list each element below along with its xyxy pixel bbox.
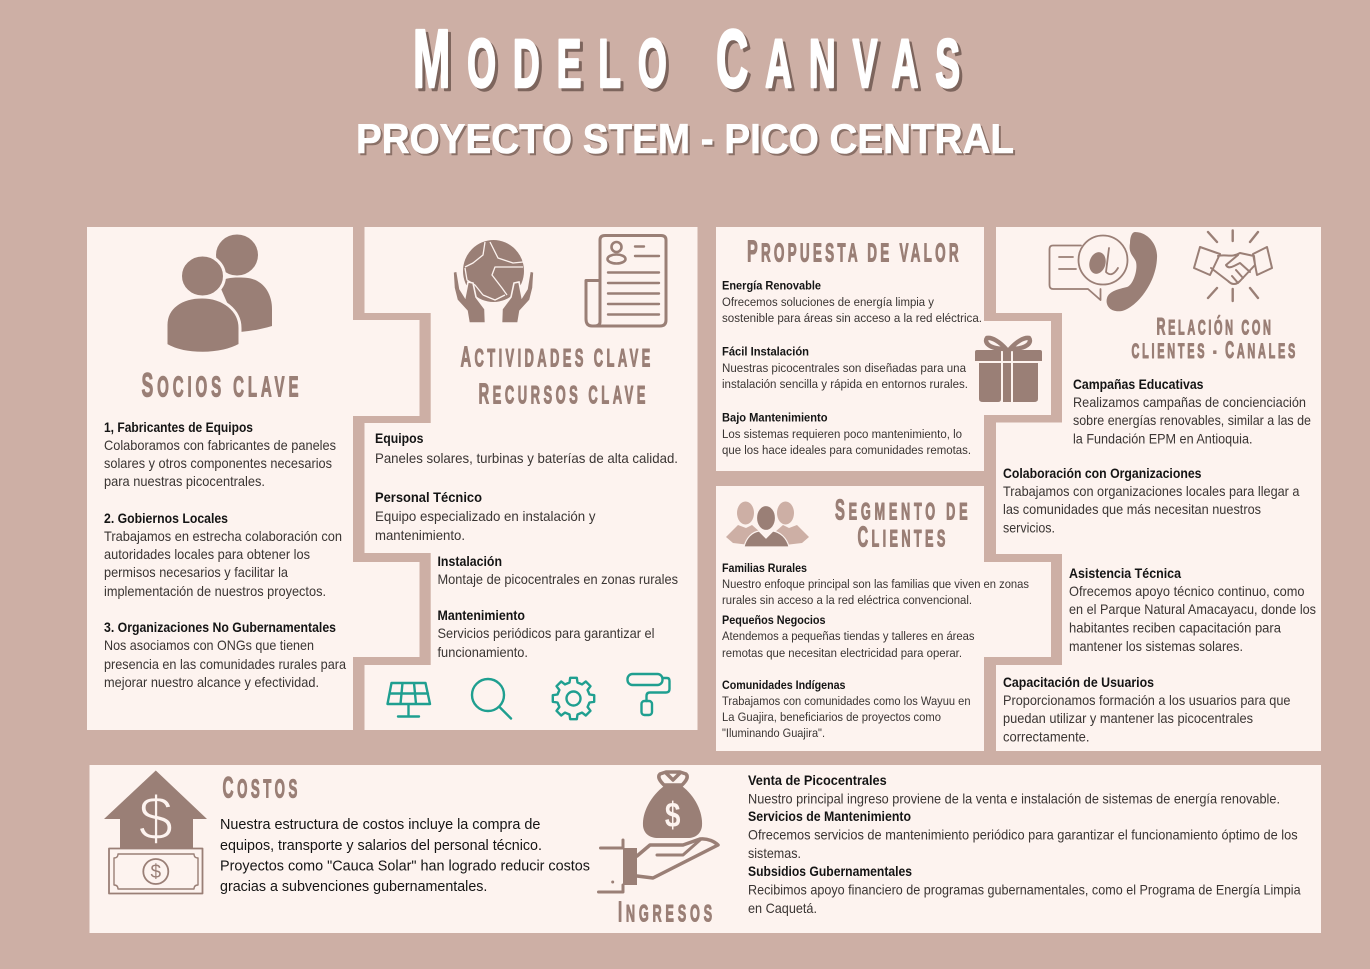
heading: ingresos: INGRESOS bbox=[618, 895, 712, 928]
text block: colaboración con organizaciones: Trabajamos con organizaciones locales para llegar a bbox=[1003, 484, 1300, 499]
text block: propuesta de valor: Ofrecemos soluciones de energía limpia y bbox=[722, 295, 935, 309]
text block: asistencia técnica bbox=[1069, 566, 1316, 654]
title: MODELO bbox=[416, 17, 670, 109]
text block: campañas educativas: la Fundación EPM en Antioquia. bbox=[1073, 432, 1252, 446]
text block: colaboración con organizaciones: las comunidades que más necesitan nuestros bbox=[1003, 502, 1261, 517]
text block: colaboración con organizaciones: servicios. bbox=[1003, 520, 1055, 536]
text block: recursos clave: mantenimiento. bbox=[375, 528, 465, 543]
heading: relación con clientes - canales: RELACIÓN CON bbox=[1156, 314, 1271, 341]
text block: costos: gracias a subvenciones gubernamentales. bbox=[220, 878, 487, 895]
text block: actividades clave: Montaje de picocentrales en zonas rurales bbox=[438, 572, 678, 587]
text block: segmento de clientes: "Iluminando Guajira". bbox=[722, 726, 825, 740]
text block: capacitación de usuarios: Proporcionamos formación a los usuarios para que bbox=[1003, 693, 1290, 708]
icon: two people bbox=[166, 234, 272, 353]
icon: hands holding globe bbox=[453, 240, 534, 323]
text block: propuesta de valor: Energía Renovable bbox=[722, 278, 821, 292]
text block: costos: equipos, transporte y salarios del personal técnico. bbox=[220, 837, 542, 854]
text block: recursos clave: Paneles solares, turbinas y baterías de alta calidad. bbox=[375, 451, 678, 466]
text block: segmento de clientes: rurales sin acceso a la red eléctrica convencional. bbox=[722, 593, 972, 607]
text block: costos bbox=[220, 816, 590, 895]
text block: colaboración con organizaciones bbox=[1003, 466, 1300, 536]
text block: segmento de clientes: Familias Rurales bbox=[722, 561, 807, 575]
text block: asistencia técnica: en el Parque Natural Amacayacu, donde los bbox=[1069, 602, 1316, 617]
text block: actividades clave bbox=[438, 554, 678, 660]
text block: ingresos: Servicios de Mantenimiento bbox=[748, 809, 911, 824]
text block: propuesta de valor: Fácil Instalación bbox=[722, 344, 809, 358]
text block: actividades clave: Mantenimiento bbox=[438, 608, 525, 623]
text block: socios clave: Colaboramos con fabricantes de paneles bbox=[104, 438, 336, 453]
text block: propuesta de valor: instalación sencilla y rápida en entornos rurales. bbox=[722, 377, 968, 391]
text block: recursos clave bbox=[375, 431, 678, 543]
text block: capacitación de usuarios bbox=[1003, 675, 1290, 744]
text block: segmento de clientes: Trabajamos con comunidades como los Wayuu en bbox=[722, 694, 970, 708]
text block: actividades clave: funcionamiento. bbox=[438, 645, 528, 660]
text block: segmento de clientes: Atendemos a pequeñas tiendas y talleres en áreas bbox=[722, 629, 974, 643]
text block: segmento de clientes bbox=[722, 561, 1029, 740]
title: CANVAS bbox=[716, 14, 960, 106]
text block: socios clave: Nos asociamos con ONGs que tienen bbox=[104, 638, 314, 653]
text block: campañas educativas: Realizamos campañas de concienciación bbox=[1073, 395, 1306, 410]
panel: segmento de clientes bbox=[716, 486, 1051, 751]
text block: asistencia técnica: habitantes reciben capacitación para bbox=[1069, 620, 1281, 636]
icon: document resume bbox=[586, 236, 666, 326]
icon: house with dollar and banknote: $ bbox=[151, 862, 162, 883]
text block: propuesta de valor: Nuestras picocentrales son diseñadas para una bbox=[722, 361, 966, 375]
heading: recursos clave: RECURSOS CLAVE bbox=[478, 377, 645, 410]
text block: socios clave: permisos necesarios y facilitar la bbox=[104, 565, 288, 580]
text block: asistencia técnica: Asistencia Técnica bbox=[1069, 566, 1181, 581]
text block: socios clave: 3. Organizaciones No Gubernamentales bbox=[104, 620, 336, 635]
text block: actividades clave: Instalación bbox=[438, 554, 502, 569]
icon: contact phone and at sign bbox=[1050, 232, 1157, 311]
text block: ingresos: Venta de Picocentrales bbox=[748, 773, 887, 788]
text block: ingresos: en Caquetá. bbox=[748, 901, 817, 916]
text block: ingresos: sistemas. bbox=[748, 846, 801, 861]
text block: recursos clave: Equipos bbox=[375, 431, 424, 446]
text block: segmento de clientes: Comunidades Indígenas bbox=[722, 678, 846, 692]
heading: relación con clientes - canales bbox=[1132, 314, 1295, 364]
panel: relación con clientes y canales bbox=[996, 227, 1321, 751]
text block: socios clave: presencia en las comunidades rurales para bbox=[104, 657, 346, 672]
text block: actividades clave: Servicios periódicos para garantizar el bbox=[438, 626, 654, 641]
text block: socios clave: para nuestras picocentrales. bbox=[104, 474, 265, 489]
panel: costos e ingresos bbox=[90, 765, 1321, 933]
text block: campañas educativas bbox=[1073, 377, 1311, 446]
text block: segmento de clientes: Pequeños Negocios bbox=[722, 613, 826, 627]
text block: segmento de clientes: Nuestro enfoque principal son las familias que viven en zonas bbox=[722, 577, 1029, 591]
text block: socios clave: Trabajamos en estrecha colaboración con bbox=[104, 529, 342, 544]
text block: propuesta de valor: que los hace ideales para comunidades remotas. bbox=[722, 443, 971, 457]
icon: money bag on hand: $ bbox=[665, 795, 681, 835]
text block: campañas educativas: Campañas Educativas bbox=[1073, 377, 1204, 392]
text block: segmento de clientes: remotas que necesitan electricidad para operar. bbox=[722, 646, 962, 660]
text block: recursos clave: Personal Técnico bbox=[375, 490, 482, 505]
text block: socios clave bbox=[104, 420, 346, 690]
text block: ingresos: Ofrecemos servicios de mantenimiento periódico para garantizar el funcionamiento óptimo de los bbox=[748, 828, 1298, 842]
text block: ingresos: Subsidios Gubernamentales bbox=[748, 864, 912, 879]
text block: socios clave: solares y otros componentes necesarios bbox=[104, 456, 332, 471]
panel: actividades y recursos clave bbox=[364, 227, 698, 730]
text block: socios clave: 2. Gobiernos Locales bbox=[104, 511, 228, 526]
icon: gear bbox=[553, 678, 594, 719]
text block: asistencia técnica: Ofrecemos apoyo técnico continuo, como bbox=[1069, 584, 1304, 599]
subtitle: PROYECTO STEM - PICO CENTRAL bbox=[358, 117, 1016, 164]
text block: recursos clave: Equipo especializado en instalación y bbox=[375, 509, 596, 524]
icon: gift box bbox=[975, 338, 1042, 402]
text block: colaboración con organizaciones: Colaboración con Organizaciones bbox=[1003, 466, 1202, 481]
text block: propuesta de valor: sostenible para áreas sin acceso a la red eléctrica. bbox=[722, 311, 982, 325]
text block: socios clave: mejorar nuestro alcance y efectividad. bbox=[104, 675, 319, 690]
text block: propuesta de valor: Los sistemas requieren poco mantenimiento, lo bbox=[722, 427, 962, 441]
heading: relación con clientes - canales: CLIENTES - CANALES bbox=[1132, 338, 1295, 364]
text block: capacitación de usuarios: puedan utilizar y mantener las picocentrales bbox=[1003, 711, 1253, 726]
heading: segmento de clientes: SEGMENTO DE bbox=[835, 493, 968, 526]
text block: campañas educativas: sobre energías renovables, similar a las de bbox=[1073, 413, 1311, 428]
title: CANVAS bbox=[719, 17, 963, 109]
heading: segmento de clientes: CLIENTES bbox=[858, 520, 945, 553]
text block: socios clave: autoridades locales para obtener los bbox=[104, 547, 310, 562]
text block: costos: Proyectos como "Cauca Solar" han logrado reducir costos bbox=[220, 858, 590, 874]
subtitle: PROYECTO STEM - PICO CENTRAL bbox=[356, 115, 1014, 162]
text block: socios clave: 1, Fabricantes de Equipos bbox=[104, 420, 253, 435]
text block: ingresos bbox=[748, 773, 1301, 916]
icon: group of people bbox=[726, 502, 809, 547]
text block: capacitación de usuarios: correctamente. bbox=[1003, 730, 1090, 744]
title: MODELO bbox=[413, 14, 667, 106]
title bbox=[413, 14, 963, 109]
heading: actividades clave: ACTIVIDADES CLAVE bbox=[460, 340, 650, 373]
panel: socios clave bbox=[87, 227, 420, 730]
heading: segmento de clientes bbox=[835, 493, 968, 553]
panel: propuesta de valor bbox=[716, 227, 1051, 471]
heading: socios clave: SOCIOS CLAVE bbox=[142, 365, 299, 404]
text block: costos: Nuestra estructura de costos incluye la compra de bbox=[220, 816, 540, 833]
heading: propuesta de valor: PROPUESTA DE VALOR bbox=[747, 235, 959, 269]
icon: magnifier bbox=[472, 679, 511, 718]
text block: asistencia técnica: mantener los sistemas solares. bbox=[1069, 639, 1243, 654]
icon: house with dollar and banknote bbox=[104, 770, 207, 894]
icon: house with dollar and banknote: $ bbox=[139, 785, 173, 854]
text block: ingresos: Recibimos apoyo financiero de programas gubernamentales, como el Programa de Energía Limpia bbox=[748, 882, 1301, 898]
icon: money bag on hand bbox=[598, 772, 718, 892]
text block: ingresos: Nuestro principal ingreso proviene de la venta e instalación de sistemas de energía renovable. bbox=[748, 792, 1280, 806]
text block: propuesta de valor bbox=[722, 278, 982, 457]
text block: socios clave: implementación de nuestros proyectos. bbox=[104, 584, 326, 599]
text block: capacitación de usuarios: Capacitación de Usuarios bbox=[1003, 675, 1154, 690]
text block: propuesta de valor: Bajo Mantenimiento bbox=[722, 410, 828, 424]
heading: costos: COSTOS bbox=[222, 771, 297, 804]
icon: solar panel bbox=[388, 683, 430, 716]
icon: paint roller bbox=[628, 674, 670, 715]
icon: handshake bbox=[1194, 230, 1272, 301]
text block: segmento de clientes: La Guajira, beneficiarios de proyectos como bbox=[722, 710, 941, 724]
